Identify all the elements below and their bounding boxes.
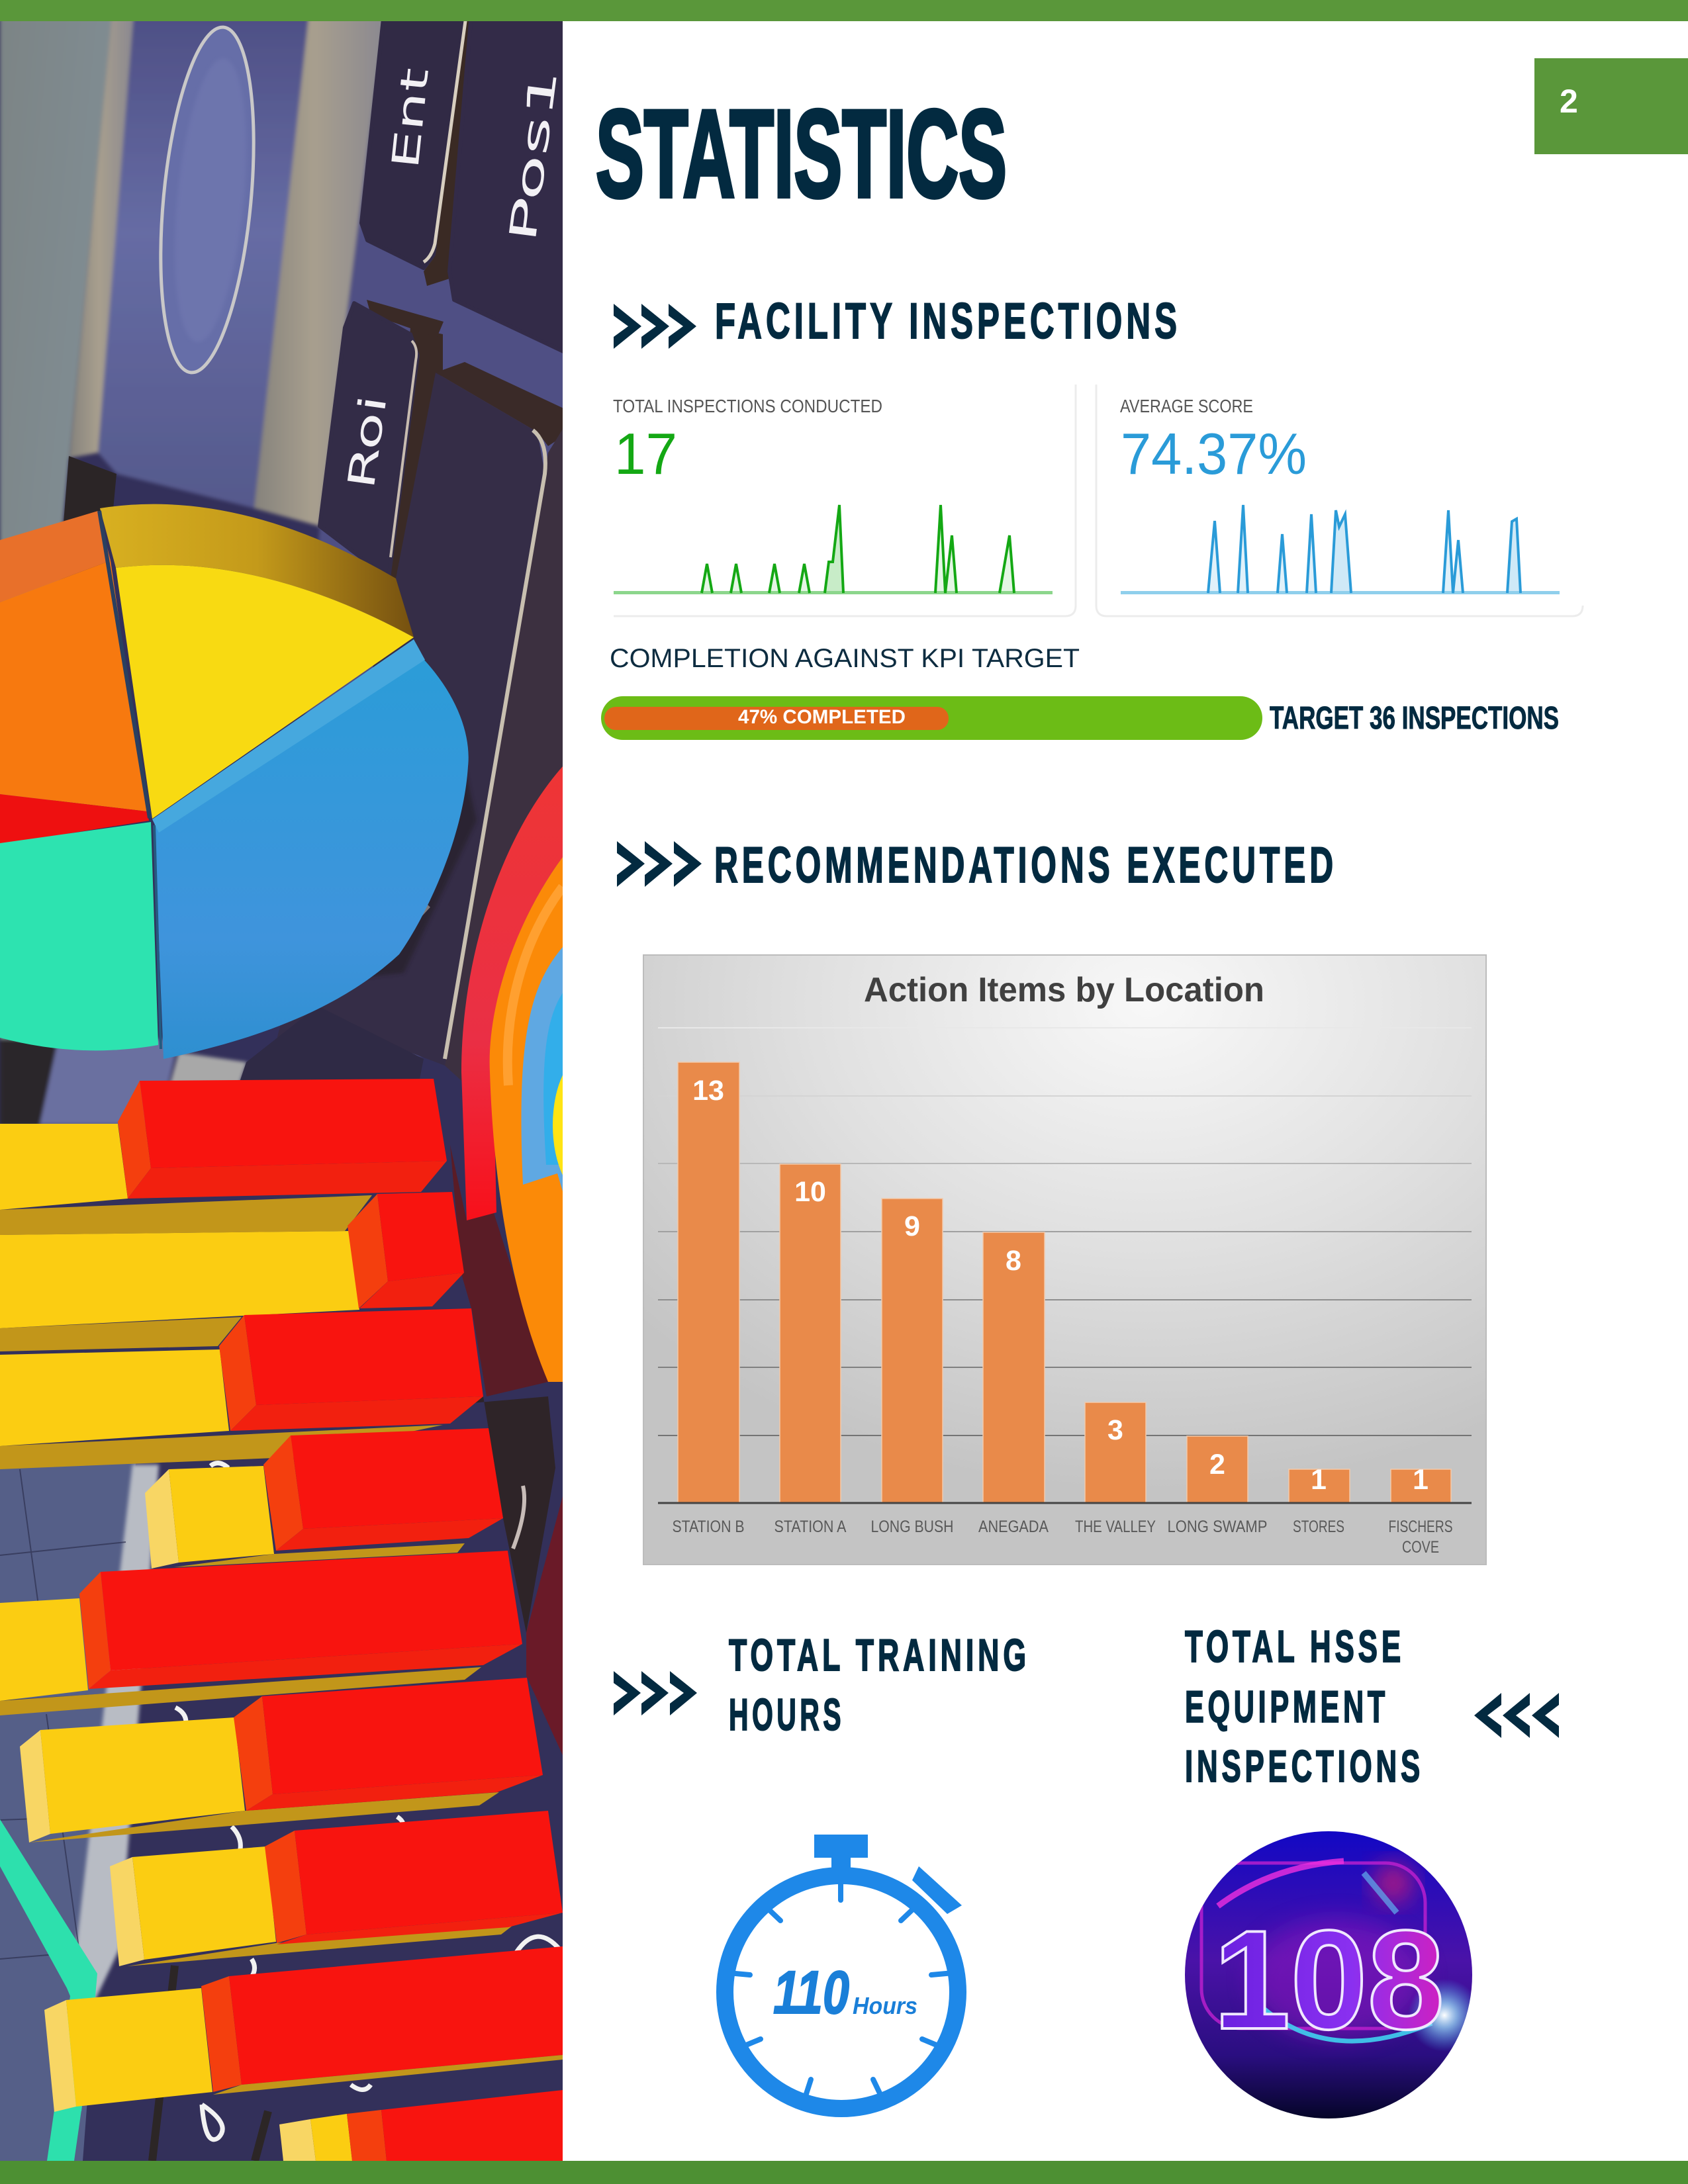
bar 3: [0, 1308, 483, 1469]
title: STATISTICS: [596, 84, 1007, 223]
panel: average score: [1096, 385, 1583, 616]
bar values: 1: [1311, 1464, 1327, 1496]
value: 17: 17: [614, 421, 677, 486]
bar 1: [0, 1079, 447, 1235]
page number tab: 2: [1560, 83, 1578, 120]
value: 74.37%: 74.37%: [1121, 421, 1307, 486]
heading: facility inspections: FACILITY INSPECTIONS: [715, 293, 1181, 349]
axis labels: STATION A: [774, 1518, 847, 1536]
sparkline: score: [1121, 505, 1560, 594]
target rings: [450, 766, 563, 1755]
key label: Ent: Ent: [384, 66, 438, 171]
sparkline: inspections: [614, 505, 1053, 594]
icon: stopwatch, 110 hours: [725, 1835, 962, 2109]
pie chart: [0, 504, 469, 1059]
heading: total training hours: TOTAL TRAINING: [729, 1630, 1030, 1680]
heading: total training hours: HOURS: [729, 1690, 845, 1740]
page number tab: [1534, 58, 1688, 154]
chart title: Action Items by Location: [864, 971, 1264, 1009]
text: completion against KPI target: COMPLETION AGAINST KPI TARGET: [610, 644, 1080, 673]
axis labels: [673, 1518, 1452, 1557]
heading: total HSSE equipment inspections: EQUIPMENT: [1185, 1682, 1389, 1732]
bar 8: [44, 1946, 563, 2112]
bar chart: action items by location: [643, 955, 1486, 1565]
label: total inspections: TOTAL INSPECTIONS CONDUCTED: [613, 396, 882, 416]
axis labels: LONG SWAMP: [1168, 1518, 1267, 1536]
bar 6: [20, 1678, 543, 1843]
background tiles and silver strip: [0, 1463, 559, 2161]
value: 108: 108: [1213, 1901, 1444, 2059]
axis labels: COVE: [1402, 1538, 1439, 1557]
heading: recommendations executed: RECOMMENDATIONS EXECUTED: [714, 837, 1337, 893]
heading: total training hours: [729, 1630, 1030, 1740]
axis labels: STORES: [1293, 1518, 1344, 1536]
axis labels: ANEGADA: [978, 1518, 1049, 1536]
icon: chevrons, recommendations: [617, 841, 702, 887]
bar 5: [0, 1551, 522, 1715]
keyboard keys: [240, 21, 563, 1081]
bar values: 9: [904, 1210, 920, 1242]
bottom green bar: [0, 2161, 1688, 2184]
axis labels: STATION B: [673, 1518, 744, 1536]
axis labels: THE VALLEY: [1075, 1518, 1156, 1536]
text: target 36 inspections: TARGET 36 INSPECTIONS: [1270, 701, 1559, 736]
bar 4: [145, 1428, 503, 1569]
notch: [64, 456, 117, 523]
bar values: 13: [692, 1075, 724, 1107]
axis labels: FISCHERS: [1389, 1518, 1452, 1536]
axis labels: LONG BUSH: [871, 1518, 953, 1536]
heading: total HSSE equipment inspections: TOTAL HSSE: [1185, 1621, 1405, 1672]
icon: chevrons, equipment: [1474, 1693, 1559, 1738]
bars: [678, 1062, 1451, 1503]
green trend line: [0, 1819, 97, 2161]
bar 2: [0, 1192, 464, 1351]
key label: Roi: Roi: [340, 392, 396, 492]
icon: chevrons, facility inspections: [614, 304, 696, 349]
key label: Pos1: Pos1: [501, 67, 567, 245]
progress fill: [604, 707, 949, 730]
bar values: 8: [1006, 1245, 1021, 1277]
bar values: 3: [1107, 1414, 1123, 1446]
bar values: 10: [794, 1176, 826, 1208]
top green bar: [0, 0, 1688, 21]
icon: chevrons, training: [614, 1671, 697, 1715]
icon: neon orb, 108: [1185, 1831, 1481, 2118]
progress bar: [601, 696, 1262, 740]
heading: total HSSE equipment inspections: INSPECTIONS: [1185, 1741, 1424, 1792]
heading: total HSSE equipment inspections: [1185, 1621, 1424, 1792]
label: average score: AVERAGE SCORE: [1120, 396, 1253, 416]
unit: hours: Hours: [853, 1992, 917, 2019]
panel: total inspections conducted: [613, 385, 1076, 616]
bar 9: [279, 2090, 563, 2161]
lens button: [159, 25, 256, 375]
photo panel: 3D pie and bar charts on a keyboard: [0, 21, 563, 2161]
bar values: 2: [1209, 1449, 1225, 1480]
bar 7: [110, 1811, 563, 1966]
bar values: 1: [1413, 1464, 1429, 1496]
progress label: 47% COMPLETED: [738, 706, 906, 728]
bar values: [692, 1075, 1429, 1496]
value: 110: 110: [773, 1959, 849, 2026]
